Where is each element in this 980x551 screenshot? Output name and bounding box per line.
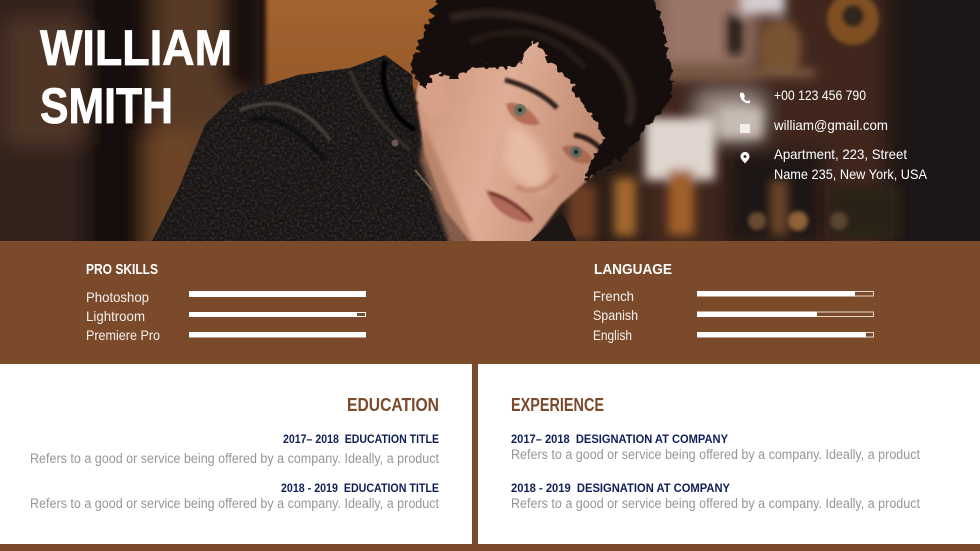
panel: language: [593, 261, 874, 343]
panel: skills band: [0, 241, 980, 364]
panel: experience: [511, 395, 920, 511]
language labels: [593, 288, 638, 343]
panel: pro skills: [86, 261, 366, 343]
header photo panel: [0, 0, 980, 241]
face: [416, 30, 612, 245]
address: [774, 146, 928, 182]
phone number: +00 123 456 790: [774, 87, 866, 103]
eyes, brows, nose, lips: [486, 80, 603, 222]
title: name: SMITH: [40, 78, 173, 134]
bokeh lights: [748, 0, 879, 231]
education entry 1: [30, 432, 439, 466]
language labels: English: [593, 327, 632, 343]
heading: experience: EXPERIENCE: [511, 395, 604, 415]
hair: [412, 0, 672, 180]
orange wall: [266, 0, 466, 90]
language labels: Spanish: [593, 307, 638, 323]
icon: envelope: [740, 124, 750, 133]
icon: location pin: [740, 152, 750, 164]
heading: education: EDUCATION: [347, 395, 439, 415]
contact details: [740, 87, 928, 182]
education entry 1: Refers to a good or service being offered by a company. Ideally, a product: [30, 451, 439, 466]
skill labels: [86, 289, 160, 343]
education entry 1: 2017– 2018 EDUCATION TITLE: [283, 432, 439, 446]
experience entry 1: [511, 432, 920, 462]
language labels: French: [593, 288, 634, 304]
address: Apartment, 223, Street: [774, 146, 907, 162]
experience entry 1: Refers to a good or service being offered by a company. Ideally, a product: [511, 447, 920, 462]
heading: language: LANGUAGE: [594, 261, 672, 278]
panel: education: [30, 395, 439, 511]
email address: william@gmail.com: [773, 117, 888, 133]
experience entry 2: 2018 - 2019 DESIGNATION AT COMPANY: [511, 481, 730, 495]
skill labels: Photoshop: [86, 289, 149, 305]
blurred background left: [0, 0, 260, 260]
language bars: [697, 291, 874, 338]
heading: pro skills: PRO SKILLS: [86, 261, 158, 278]
skill labels: Lightroom: [86, 308, 145, 324]
title: name: WILLIAM: [40, 20, 232, 76]
title: name: [40, 20, 232, 134]
bottom band: [0, 544, 980, 551]
experience entry 1: 2017– 2018 DESIGNATION AT COMPANY: [511, 432, 728, 446]
jacket: [152, 55, 450, 241]
blurred background right: [638, 0, 980, 241]
icon: phone: [740, 92, 750, 103]
address: Name 235, New York, USA: [774, 166, 928, 182]
skill labels: Premiere Pro: [86, 327, 160, 343]
panel: white lower area: [0, 364, 980, 544]
education entry 2: 2018 - 2019 EDUCATION TITLE: [281, 481, 439, 495]
education entry 2: Refers to a good or service being offered by a company. Ideally, a product: [30, 496, 439, 511]
center divider: [472, 364, 478, 544]
education entry 2: [30, 481, 439, 511]
experience entry 2: [511, 481, 920, 511]
skill bars: [189, 291, 366, 338]
experience entry 2: Refers to a good or service being offered by a company. Ideally, a product: [511, 496, 920, 511]
